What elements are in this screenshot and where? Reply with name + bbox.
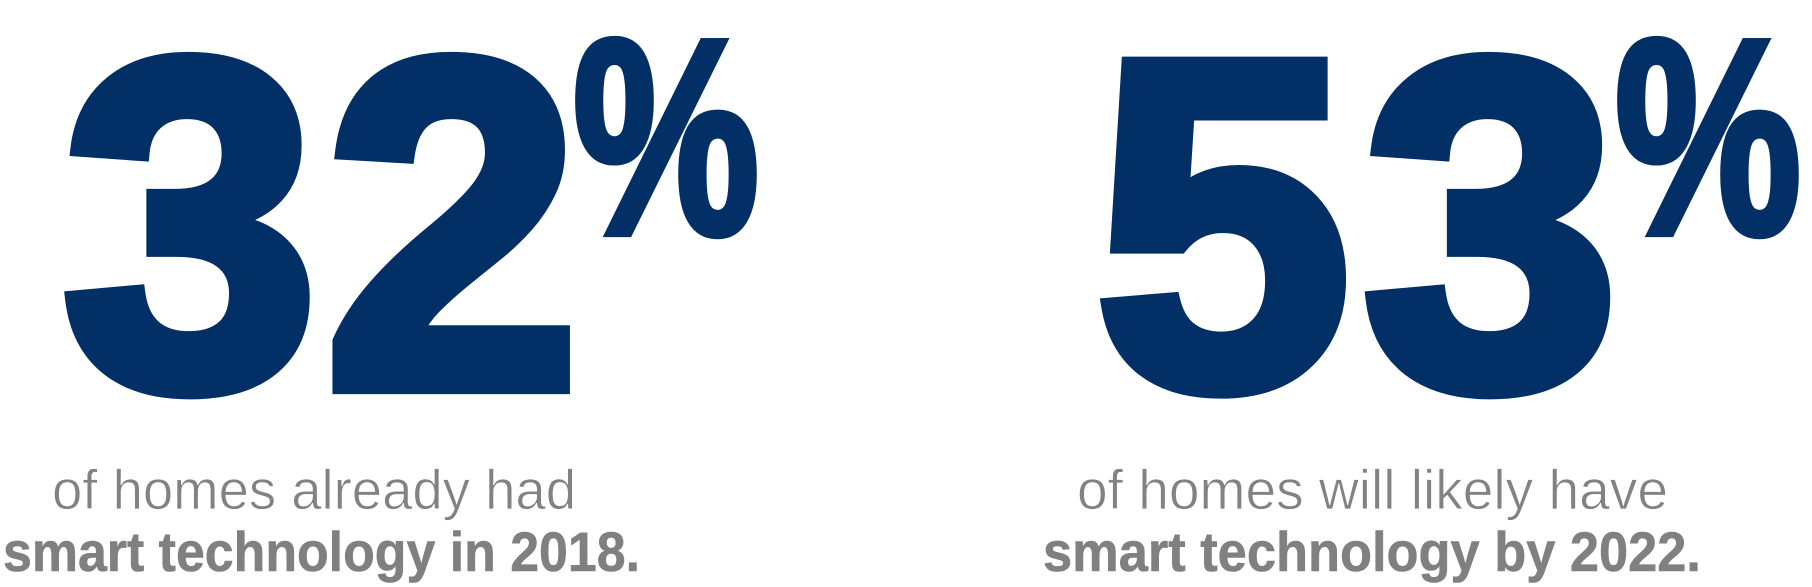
caption: of homes will likely have smart technology by 2022 <box>1043 458 1701 583</box>
panel: 53 percent by 2022 <box>1043 0 1801 583</box>
caption: of homes will likely have smart technology by 2022: smart technology by 2022. <box>1043 520 1701 583</box>
panel: 32 percent in 2018 <box>3 0 759 583</box>
caption: of homes already had smart technology in 2018 <box>3 458 640 583</box>
caption: of homes already had smart technology in 2018: of homes already had <box>52 458 576 521</box>
caption: of homes already had smart technology in 2018: smart technology in 2018. <box>3 520 640 583</box>
caption: of homes will likely have smart technology by 2022: of homes will likely have <box>1077 458 1668 521</box>
